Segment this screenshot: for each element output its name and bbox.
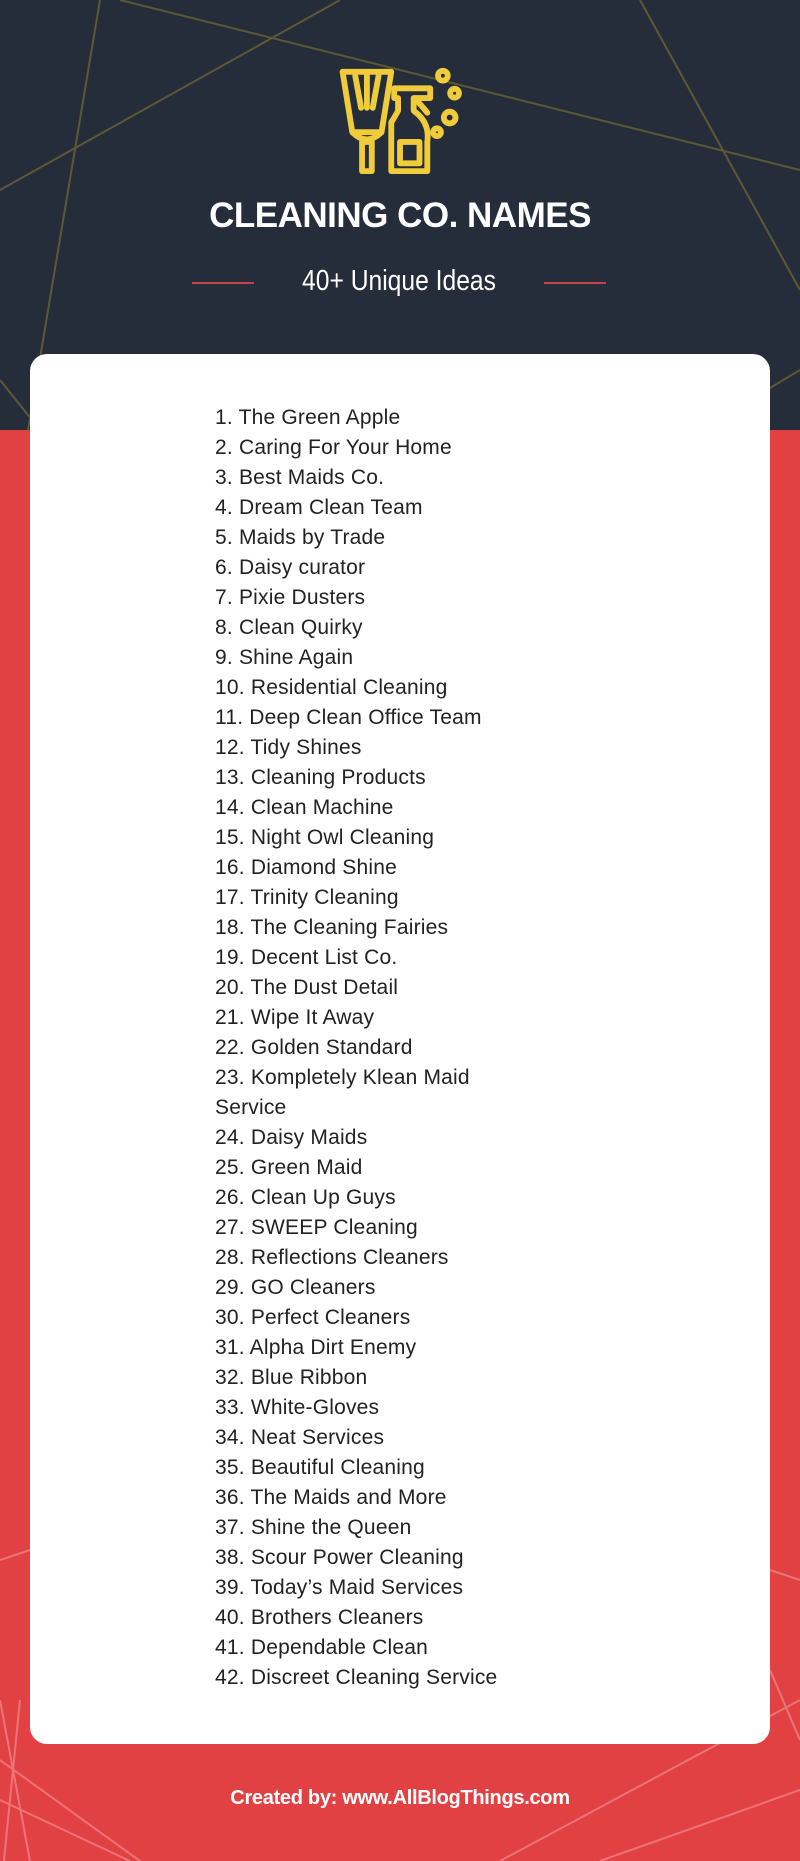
name list: 20. The Dust Detail (215, 976, 398, 999)
name list: 10. Residential Cleaning (215, 676, 447, 699)
name list: 35. Beautiful Cleaning (215, 1456, 425, 1479)
name list: 21. Wipe It Away (215, 1006, 374, 1029)
name list: 18. The Cleaning Fairies (215, 916, 448, 939)
name list (215, 406, 497, 1689)
name list: 32. Blue Ribbon (215, 1366, 367, 1389)
name list: 40. Brothers Cleaners (215, 1606, 423, 1629)
name list: 22. Golden Standard (215, 1036, 413, 1059)
name list: 38. Scour Power Cleaning (215, 1546, 464, 1569)
name list: 42. Discreet Cleaning Service (215, 1666, 497, 1689)
name list: 39. Today’s Maid Services (215, 1576, 463, 1599)
name list: 36. The Maids and More (215, 1486, 447, 1509)
name list: Service (215, 1096, 286, 1119)
name list: 33. White-Gloves (215, 1396, 379, 1419)
title: CLEANING CO. NAMES (209, 196, 591, 235)
name list: 19. Decent List Co. (215, 946, 397, 969)
name list: 9. Shine Again (215, 646, 353, 669)
name list: 12. Tidy Shines (215, 736, 362, 759)
name list: 15. Night Owl Cleaning (215, 826, 434, 849)
name list: 13. Cleaning Products (215, 766, 426, 789)
name list: 1. The Green Apple (215, 406, 400, 429)
name list: 30. Perfect Cleaners (215, 1306, 410, 1329)
subtitle with red rules: 40+ Unique Ideas (302, 265, 496, 297)
name list: 37. Shine the Queen (215, 1516, 411, 1539)
name list: 5. Maids by Trade (215, 526, 385, 549)
name list: 3. Best Maids Co. (215, 466, 384, 489)
name list: 2. Caring For Your Home (215, 436, 452, 459)
name list: 7. Pixie Dusters (215, 586, 365, 609)
footer credit: Created by: www.AllBlogThings.com (230, 1787, 570, 1809)
name list: 24. Daisy Maids (215, 1126, 367, 1149)
name list: 14. Clean Machine (215, 796, 394, 819)
name list: 17. Trinity Cleaning (215, 886, 399, 909)
name list: 29. GO Cleaners (215, 1276, 376, 1299)
name list: 16. Diamond Shine (215, 856, 397, 879)
icon: broom and spray bottle (340, 68, 462, 174)
name list: 26. Clean Up Guys (215, 1186, 396, 1209)
panel: name list card (30, 354, 770, 1744)
name list: 8. Clean Quirky (215, 616, 363, 639)
name list: 41. Dependable Clean (215, 1636, 428, 1659)
name list: 6. Daisy curator (215, 556, 365, 579)
name list: 27. SWEEP Cleaning (215, 1216, 418, 1239)
name list: 4. Dream Clean Team (215, 496, 423, 519)
name list: 34. Neat Services (215, 1426, 384, 1449)
name list: 25. Green Maid (215, 1156, 363, 1179)
name list: 31. Alpha Dirt Enemy (215, 1336, 416, 1359)
name list: 28. Reflections Cleaners (215, 1246, 449, 1269)
name list: 23. Kompletely Klean Maid (215, 1066, 470, 1089)
name list: 11. Deep Clean Office Team (215, 706, 482, 729)
